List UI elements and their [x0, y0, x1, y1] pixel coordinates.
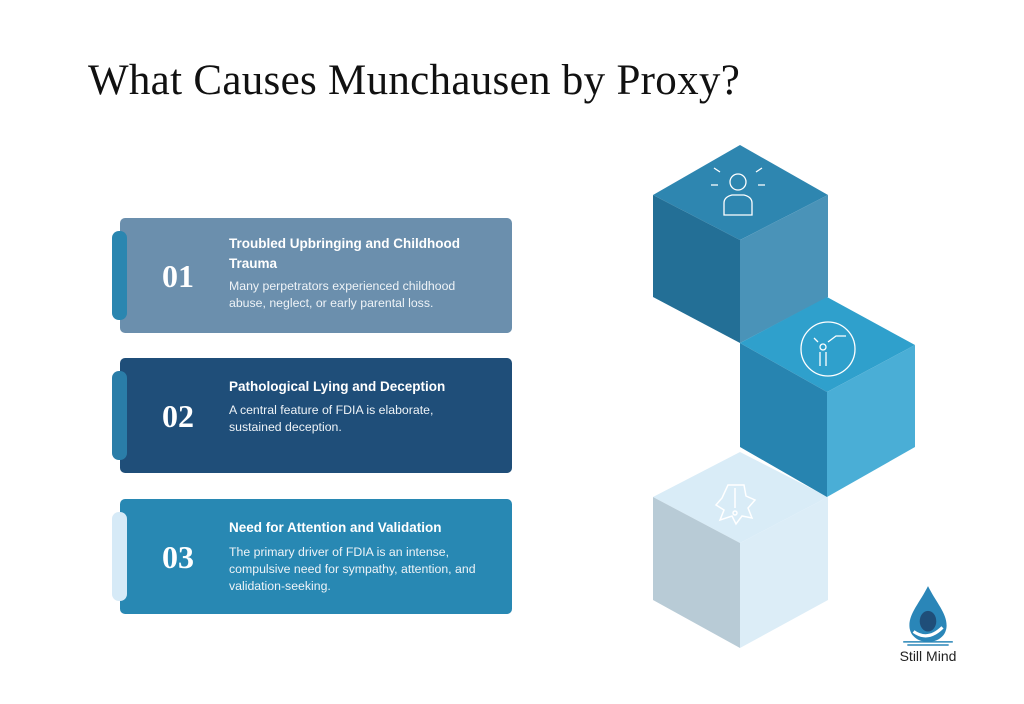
icon: stressed person	[711, 168, 765, 215]
card 01: 01	[162, 258, 194, 294]
card 03	[120, 499, 512, 614]
logo: Still Mind	[900, 586, 956, 664]
title: What Causes Munchausen by Proxy?	[88, 57, 740, 104]
icon: alert	[716, 485, 755, 524]
cube 2	[740, 297, 915, 497]
card 03: Need for Attention and Validation	[229, 520, 442, 535]
card 02: Pathological Lying and Deception	[229, 379, 445, 394]
card 01: Many perpetrators experienced childhood abuse, neglect, or early parental loss.	[229, 279, 455, 310]
card 01	[120, 218, 512, 333]
cube 3	[653, 452, 828, 648]
card 02: A central feature of FDIA is elaborate, sustained deception.	[229, 403, 433, 434]
card 03: The primary driver of FDIA is an intense, compulsive need for sympathy, attention, and validation-seeking.	[229, 545, 476, 593]
cube 1	[653, 145, 828, 343]
logo: Still Mind: Still Mind	[900, 648, 956, 664]
card 01: Troubled Upbringing and Childhood Trauma	[229, 236, 460, 271]
card 02	[120, 358, 512, 473]
card 02: 02	[162, 398, 194, 434]
icon: manipulation hand	[801, 322, 855, 376]
card 03: 03	[162, 539, 194, 575]
